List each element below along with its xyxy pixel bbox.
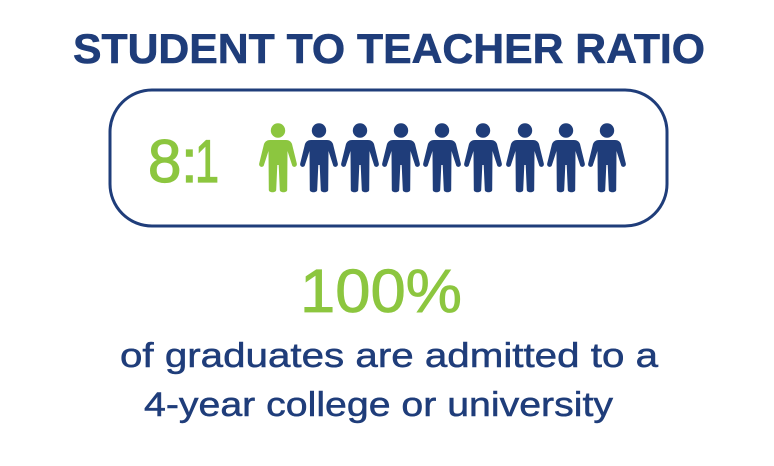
panel: ratio box [110,90,667,226]
ratio number: 8: [148,128,198,195]
caption: of graduates are admitted to a [120,337,658,375]
caption: 4-year college or university [144,386,613,424]
ratio number [148,128,219,196]
percentage: 100% [300,257,462,325]
icon row: people [259,123,626,192]
ratio number: 1 [195,129,219,196]
title: STUDENT TO TEACHER RATIO [73,25,705,72]
icon: teachers blue [300,123,626,192]
caption [120,337,658,424]
icon: student green [259,123,297,192]
